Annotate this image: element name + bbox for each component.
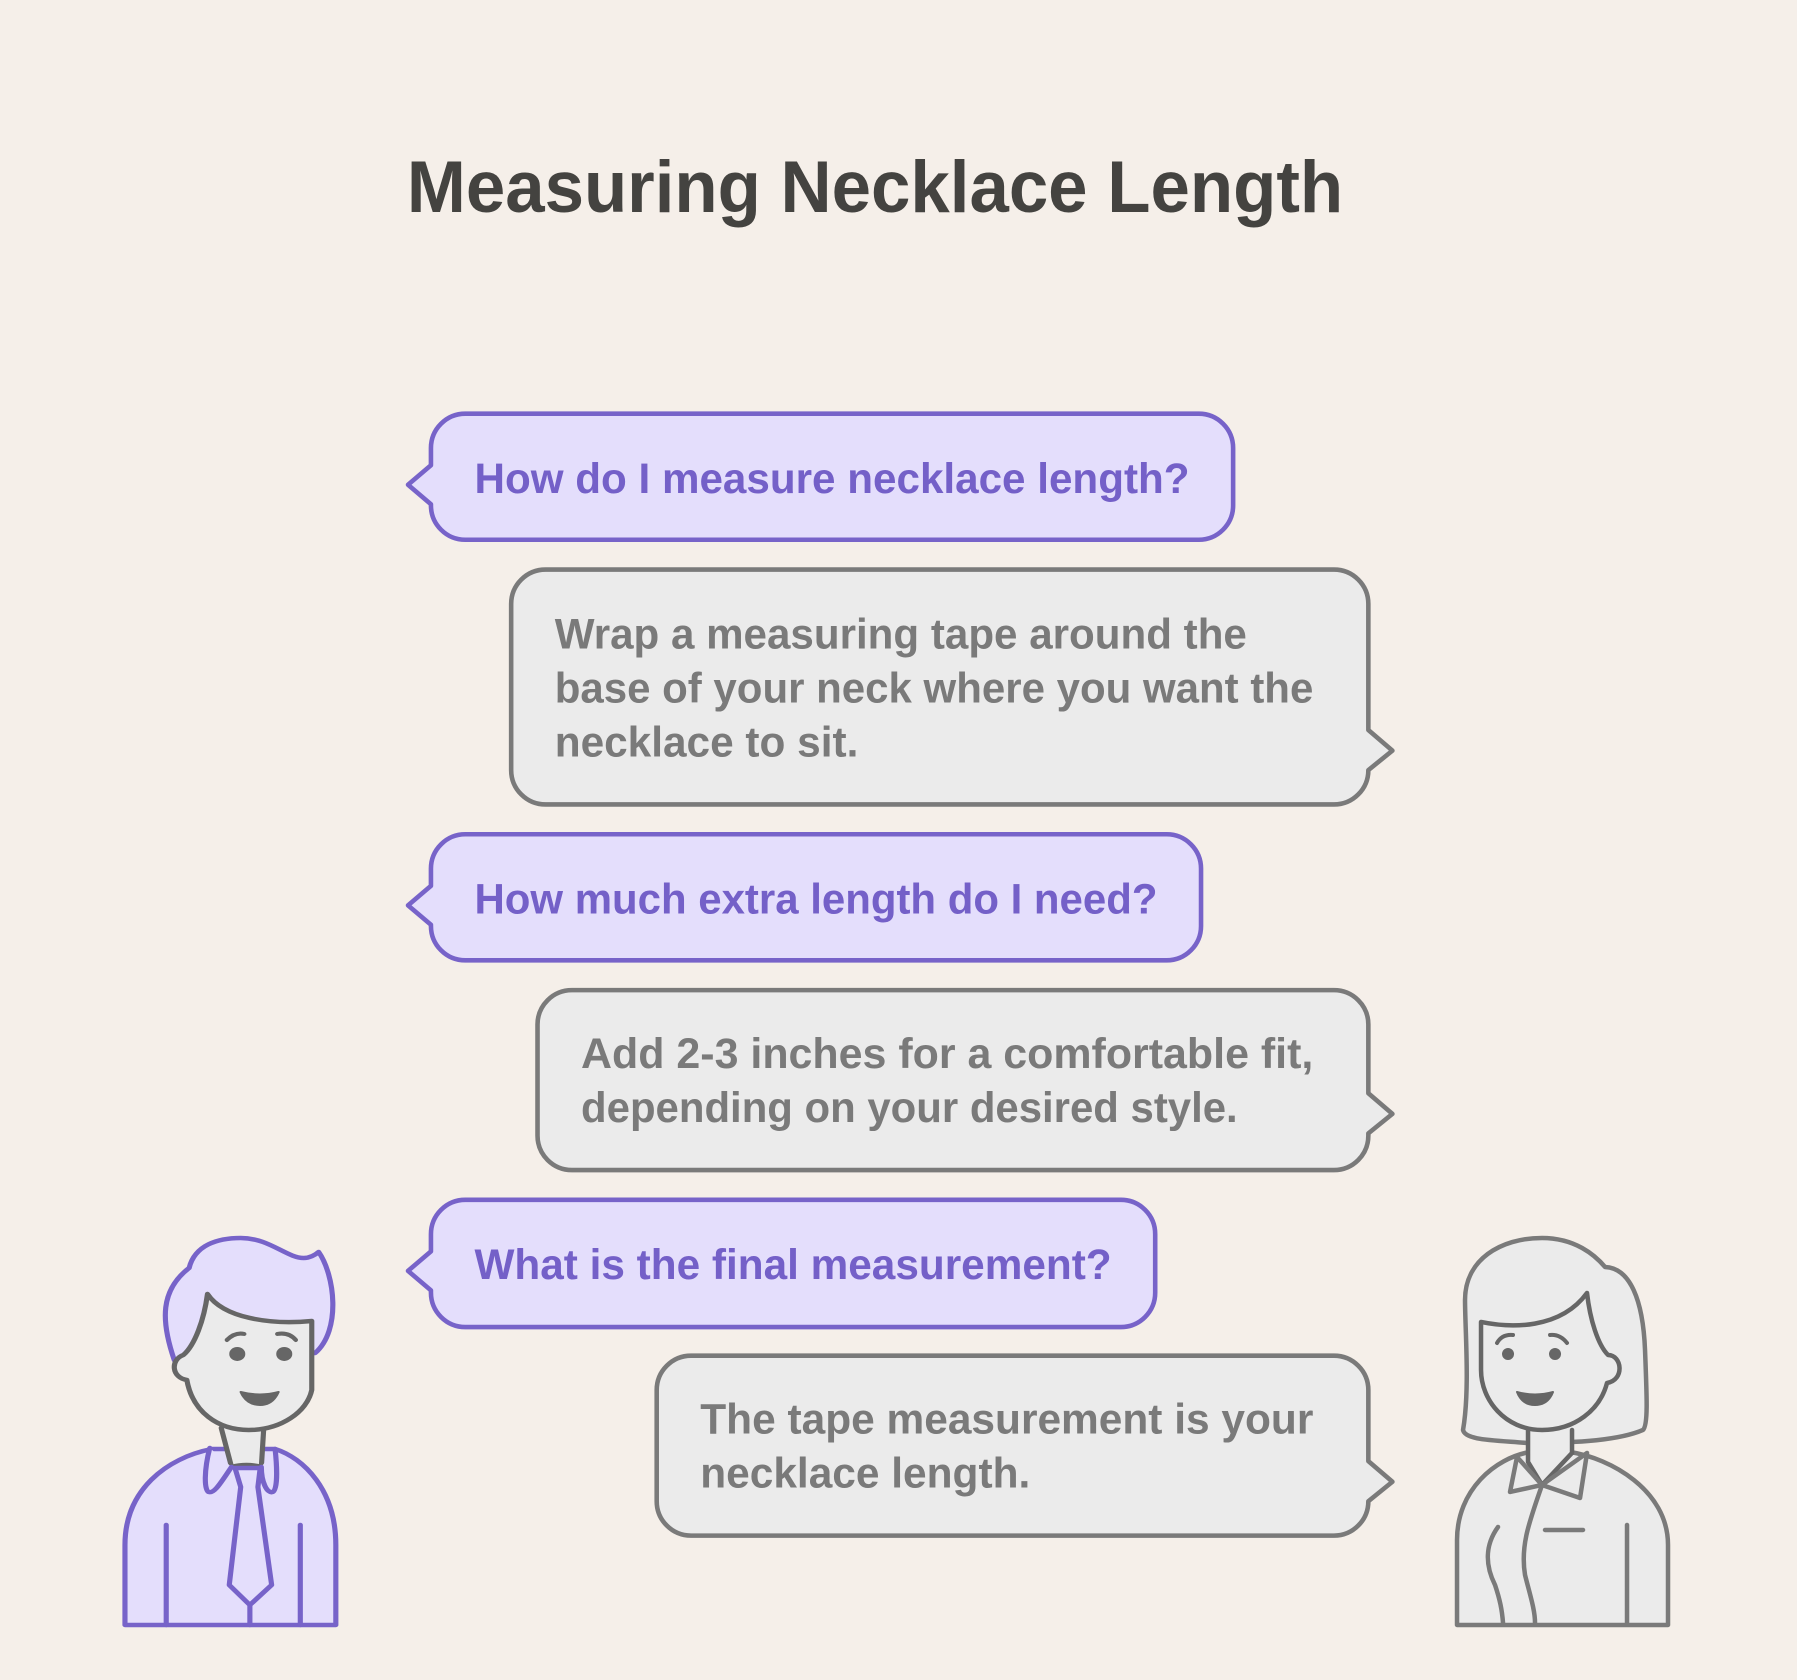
icon: woman — [1457, 1238, 1668, 1625]
bubble: answer 3: The tape measurement is your — [700, 1396, 1313, 1443]
bubble: question 2: How much extra length do I need? — [474, 875, 1157, 922]
title: Measuring Necklace Length — [407, 146, 1343, 228]
bubble: question 3 — [408, 1200, 1155, 1327]
bubble: answer 3: necklace length. — [700, 1449, 1030, 1496]
bubble: question 2 — [408, 834, 1201, 960]
bubble: answer 2 — [538, 990, 1392, 1170]
bubble: answer 1: necklace to sit. — [555, 718, 858, 765]
bubble: question 1 — [408, 414, 1233, 540]
bubble: answer 2: depending on your desired style. — [581, 1084, 1238, 1131]
bubble: answer 1: base of your neck where you want the — [555, 664, 1313, 711]
icon: man — [125, 1238, 336, 1625]
bubble: answer 1 — [511, 570, 1392, 804]
bubble: question 3: What is the final measurement? — [474, 1241, 1112, 1288]
bubble: answer 1: Wrap a measuring tape around the — [555, 611, 1247, 658]
bubble: question 1: How do I measure necklace length? — [474, 455, 1190, 502]
bubble: answer 2: Add 2-3 inches for a comfortable fit, — [581, 1030, 1313, 1077]
bubble: answer 3 — [657, 1356, 1392, 1536]
